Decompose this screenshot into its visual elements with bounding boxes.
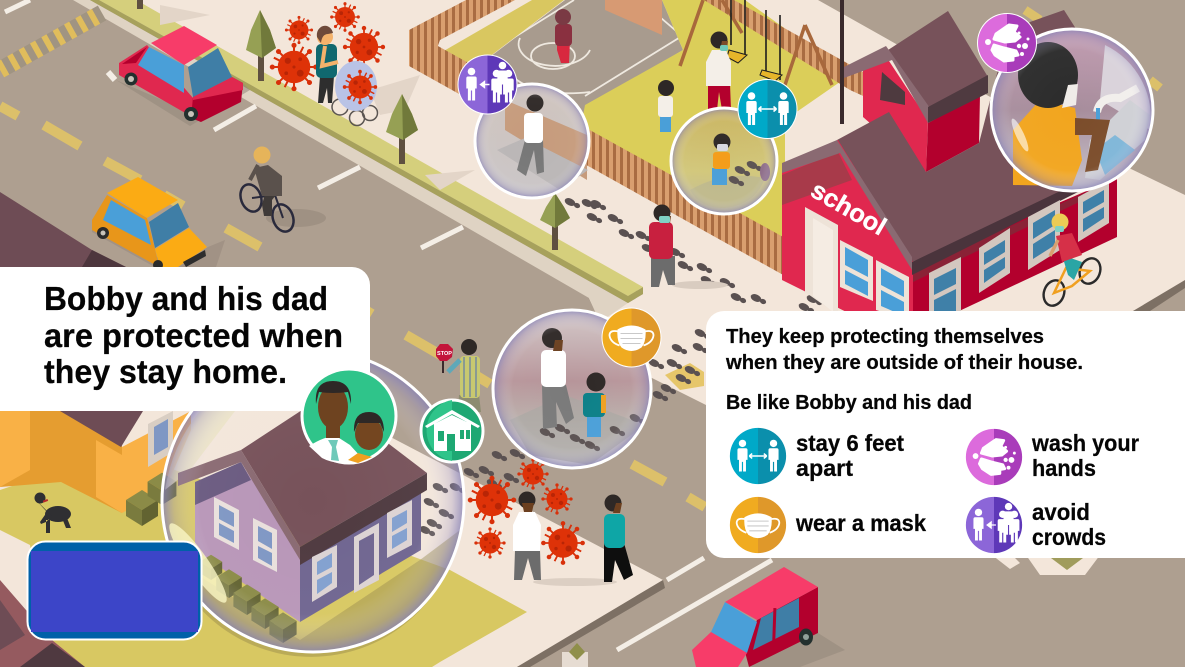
- front wall: [782, 140, 913, 345]
- school building: [782, 10, 1117, 345]
- icon: mask on bubble: [602, 308, 662, 368]
- dark pole: [840, 0, 844, 124]
- portrait: Bobby and dad: [302, 369, 396, 463]
- crossing guard: [436, 339, 481, 412]
- heading text: are protected when: [44, 317, 343, 354]
- pale reflection: [165, 411, 235, 490]
- cyclist on road: [237, 146, 326, 235]
- basketball court: [470, 0, 683, 125]
- person on court: [555, 9, 572, 63]
- virus on stroller: [344, 70, 376, 104]
- tree: [540, 193, 570, 250]
- roof front edge: [782, 140, 912, 270]
- item: wash your hands: hands: [1032, 455, 1096, 481]
- dormer roof: [888, 11, 988, 113]
- blue box: [28, 542, 202, 640]
- intro text: They keep protecting themselves: [726, 326, 1044, 348]
- upper rear roof: [1000, 10, 1100, 90]
- red van: [692, 567, 845, 667]
- tree trunk top: [137, 0, 143, 9]
- item: wear a mask: wear a mask: [795, 510, 926, 536]
- icon: wash hands on bubble: [977, 13, 1037, 73]
- panel: headline: [0, 267, 370, 411]
- road curb band: [73, 0, 628, 322]
- fence in bubble: [505, 100, 587, 180]
- brick wall: [605, 0, 662, 35]
- icon: home: [421, 400, 483, 462]
- bubble glass: [162, 350, 464, 652]
- yellow house: [0, 411, 191, 513]
- white shirt man on sidewalk: [513, 492, 617, 586]
- glare: [1009, 117, 1031, 153]
- item: wash your hands: [966, 429, 1139, 485]
- bubble: hand washing: [991, 29, 1153, 191]
- gable shadow: [782, 152, 852, 205]
- icon: avoid crowds on bubble: [458, 54, 518, 114]
- dormer walls: [863, 55, 928, 172]
- house walls: [195, 463, 300, 622]
- stop sign: STOP: [437, 351, 452, 357]
- back fence: [704, 0, 872, 100]
- viruses near stroller: [271, 3, 384, 90]
- yard tint: [170, 530, 460, 657]
- orange shirt: [1013, 100, 1082, 186]
- item: avoid crowds: crowds: [1032, 524, 1106, 550]
- icon: stay apart on bubble: [738, 79, 798, 139]
- playground lawn: [580, 0, 850, 245]
- item: avoid crowds: [966, 497, 1106, 553]
- yellow car: [92, 177, 225, 270]
- yellow lawn strip by court: [442, 0, 564, 70]
- viruses near walkers: [469, 459, 584, 564]
- side windows: [929, 257, 961, 320]
- teal shirt man on sidewalk: [604, 494, 633, 582]
- heading text: Bobby and his dad: [44, 280, 328, 317]
- pale wall: [1100, 45, 1151, 130]
- man in bubble: [517, 94, 544, 176]
- lower curb: [517, 580, 665, 667]
- subheading: Be like Bobby and his dad: [726, 392, 972, 414]
- tree: [386, 94, 418, 164]
- house windows: [214, 497, 239, 550]
- faucet: [1097, 88, 1138, 112]
- bubble: house: [162, 350, 464, 657]
- olive bushes: [126, 473, 176, 526]
- lower sidewalk: [0, 400, 663, 667]
- upper sidewalk: [136, 0, 1185, 405]
- top right road dash: [1025, 10, 1160, 88]
- front windows: [840, 240, 873, 301]
- child in bubble: [712, 134, 730, 185]
- item: stay 6 feet apart: stay 6 feet: [796, 430, 904, 456]
- main roof: [837, 62, 1115, 262]
- left fence upper: [409, 0, 515, 62]
- item: wash your hands: wash your: [1031, 430, 1139, 456]
- planter: [562, 643, 588, 667]
- road dashes: [0, 106, 705, 507]
- woman with mask: [706, 32, 731, 110]
- striped speed bump: [0, 13, 102, 70]
- head: [1018, 42, 1078, 108]
- stroller: [332, 61, 378, 126]
- small planter strip below panel: [992, 555, 1100, 575]
- sink: [1085, 100, 1150, 180]
- tree: [246, 10, 276, 81]
- intro text: when they are outside of their house.: [725, 352, 1083, 374]
- footprints on the sidewalk: [418, 196, 823, 537]
- man in red sweater: [649, 204, 728, 289]
- house gable: [195, 462, 251, 505]
- bubble: man keeps distance: [475, 84, 589, 198]
- tree shadows: [160, 5, 475, 190]
- boy in bubble: [583, 372, 606, 437]
- bubble: man and boy in masks: [493, 310, 651, 468]
- grass strip: [90, 0, 643, 303]
- item: avoid crowds: avoid: [1032, 499, 1090, 525]
- brown roof lower left: [0, 580, 85, 667]
- man with stroller: [316, 26, 378, 125]
- roof eave: [912, 172, 1100, 275]
- item: stay 6 feet apart: [730, 428, 904, 484]
- red parked car: [116, 26, 250, 126]
- dark roof upper left: [0, 192, 126, 267]
- man in bubble: [541, 328, 574, 429]
- item: wear a mask: [730, 497, 926, 553]
- panel: advice: [706, 311, 1185, 558]
- cyclist at school: [1040, 214, 1104, 309]
- long fence: [409, 30, 785, 276]
- parking lines: [5, 0, 772, 650]
- door: [805, 207, 838, 315]
- heading text: [44, 280, 343, 390]
- side wall: [913, 178, 1117, 320]
- house lawn: [0, 450, 527, 667]
- intro text: [725, 326, 1083, 374]
- swing set: [680, 0, 832, 85]
- bubble: child on playground: [671, 108, 777, 214]
- black dog: [34, 492, 71, 533]
- school sign: school: [806, 176, 891, 241]
- right curb: [1133, 280, 1185, 311]
- house roof: [241, 395, 427, 547]
- item: stay 6 feet apart: apart: [796, 455, 853, 481]
- hedge: [200, 555, 297, 643]
- arm: [1075, 118, 1110, 172]
- child on lawn: [658, 80, 674, 132]
- bubble glare: [162, 518, 234, 608]
- heading text: they stay home.: [44, 353, 287, 390]
